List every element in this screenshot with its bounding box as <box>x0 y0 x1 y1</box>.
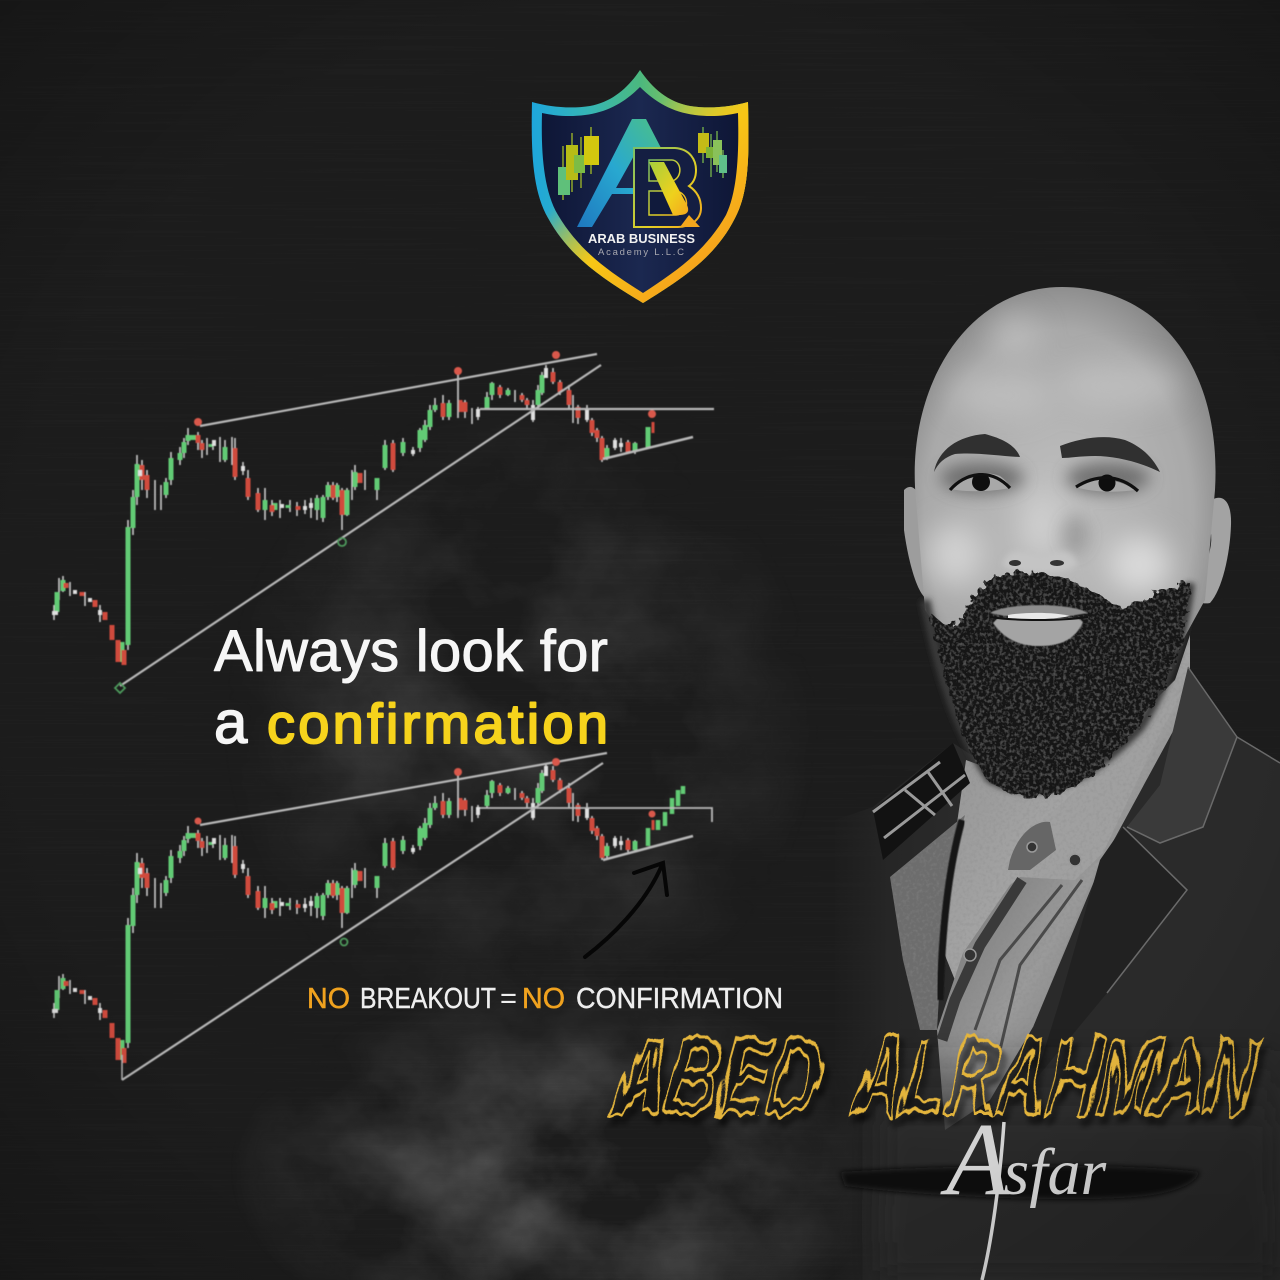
swing markers <box>194 758 656 946</box>
candlesticks <box>52 365 635 665</box>
plaid collar <box>873 743 970 860</box>
left candlesticks <box>558 127 599 200</box>
caption NO: NO <box>307 983 350 1015</box>
portrait <box>835 287 1280 1280</box>
logo name: ARAB BUSINESS <box>588 232 695 246</box>
letter B counters <box>649 160 686 215</box>
nose <box>1002 551 1078 572</box>
left eye <box>950 473 1010 491</box>
extra red candle <box>652 820 654 830</box>
headline line one: Always look for <box>214 619 608 684</box>
letter A <box>577 119 661 227</box>
teeth <box>1008 613 1070 619</box>
signature <box>940 1102 1107 1280</box>
trend lines <box>120 354 714 686</box>
last red candle <box>652 422 654 433</box>
signature text: Asfar <box>940 1102 1107 1217</box>
logo subtitle: Academy L.L.C <box>598 247 684 258</box>
right eye <box>1076 474 1138 492</box>
head <box>915 287 1216 700</box>
left ear <box>904 487 930 600</box>
headline highlight: confirmation <box>267 692 608 755</box>
signature flourish <box>982 1122 1004 1280</box>
caption BREAKOUT: BREAKOUT <box>360 983 496 1015</box>
lower lapel <box>1035 827 1187 1080</box>
left eyebrow <box>934 434 1020 472</box>
last candles <box>646 427 650 448</box>
caption equals: = <box>500 983 517 1015</box>
beard halo <box>925 583 1190 789</box>
shirt folds <box>975 880 1082 1050</box>
forehead highlights <box>950 313 1180 417</box>
smoke <box>274 524 828 1280</box>
chart: top <box>52 351 714 693</box>
A right leg <box>649 162 688 215</box>
cheek highlights <box>927 491 1172 595</box>
caption CONFIRMATION: CONFIRMATION <box>576 983 783 1015</box>
right eyebrow <box>1060 437 1160 472</box>
beard <box>930 572 1190 797</box>
chin patch <box>993 618 1083 646</box>
jacket <box>835 667 1280 1280</box>
shirt placket <box>942 880 1022 1040</box>
collar tab <box>1008 822 1056 870</box>
shirt buttons <box>964 842 1081 961</box>
upper lapel <box>1127 667 1237 843</box>
caption <box>307 983 783 1015</box>
chart: bottom <box>52 753 712 1080</box>
mouth line <box>990 617 1088 620</box>
ear detail <box>1202 530 1210 566</box>
shield face <box>542 87 738 293</box>
shirt lower <box>937 860 1100 1130</box>
arrow <box>585 863 667 957</box>
A base corner <box>680 215 700 227</box>
eye shadow <box>940 462 1150 555</box>
chest and neck <box>940 635 1190 1027</box>
lapel edges <box>1107 667 1280 993</box>
shield border <box>532 70 748 303</box>
logo <box>532 70 748 303</box>
headline <box>214 619 608 756</box>
caption second NO: NO <box>522 983 565 1015</box>
candlesticks <box>52 763 635 1063</box>
left shirt fold <box>940 820 962 1000</box>
right candlesticks <box>698 127 727 178</box>
lower fade <box>880 1040 1280 1280</box>
upper lip <box>990 605 1088 616</box>
signature brush <box>840 1166 1200 1199</box>
right ear <box>1194 498 1231 603</box>
left shirt panel <box>890 815 965 1030</box>
headline letter a: a <box>214 689 248 756</box>
name first word: ABED <box>605 1015 829 1136</box>
trend lines <box>122 753 712 1080</box>
shirt collar <box>1012 690 1183 880</box>
letter B outline <box>634 148 701 227</box>
name <box>605 1015 1266 1136</box>
swing markers <box>115 351 656 693</box>
breakout-free candles <box>648 786 683 846</box>
